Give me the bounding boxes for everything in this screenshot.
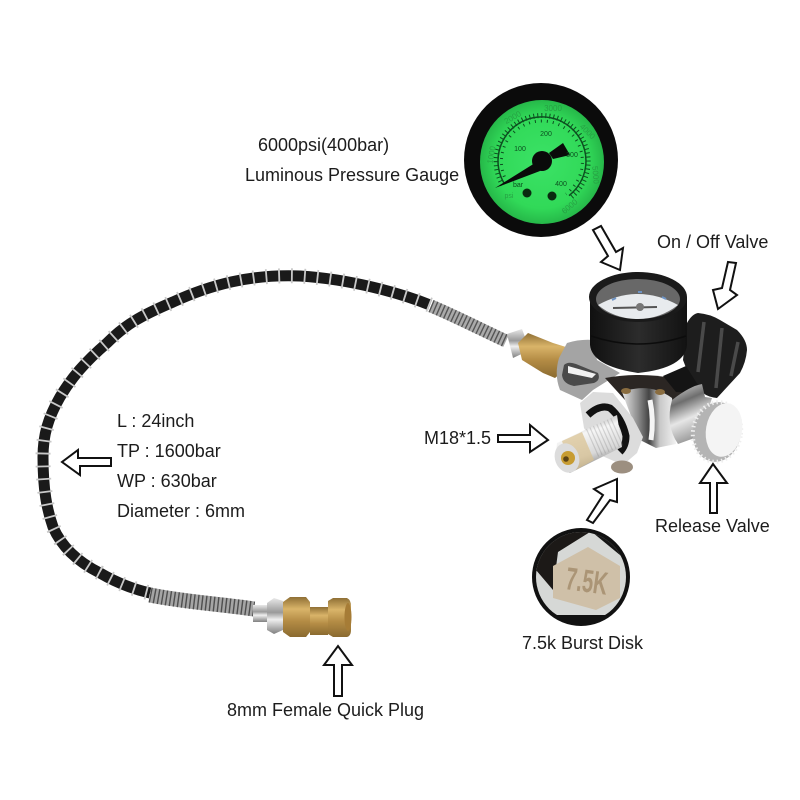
pressure gauge — [589, 272, 687, 373]
gauge numbers: 2000 — [503, 109, 523, 126]
centre ball — [621, 388, 676, 448]
label: quick plug: 8mm Female Quick Plug — [227, 700, 424, 720]
hose specifications: L : 24inch — [117, 411, 194, 431]
gauge numbers: bar — [513, 182, 524, 189]
hose specifications: WP : 630bar — [117, 471, 217, 491]
hose specifications: Diameter : 6mm — [117, 501, 245, 521]
dark valve seat — [605, 375, 692, 425]
arrow: to gauge — [593, 226, 623, 270]
title: gauge label: 6000psi(400bar) — [258, 135, 389, 155]
gauge numbers: 5000 — [590, 166, 601, 185]
black hose — [43, 276, 430, 593]
gauge numbers: 1000 — [486, 145, 498, 164]
gauge numbers: psi — [505, 193, 514, 200]
arrow: to release valve — [700, 464, 727, 513]
arrow: to quick plug — [324, 646, 352, 696]
hose specifications: TP : 1600bar — [117, 441, 221, 461]
label: on/off valve: On / Off Valve — [657, 232, 768, 252]
callout: gauge close-up — [464, 83, 618, 237]
on/off valve knob — [663, 313, 747, 398]
M18 threaded stem — [551, 407, 626, 476]
arrow: to burst disk — [587, 479, 617, 523]
lower metal spring — [150, 595, 254, 609]
label: burst disk: 7.5k Burst Disk — [522, 633, 644, 653]
label: M18: M18*1.5 — [424, 428, 491, 448]
label: release valve: Release Valve — [655, 516, 770, 536]
hose specifications — [117, 411, 245, 521]
burst disk bolt — [611, 460, 633, 474]
hose assembly — [43, 276, 506, 609]
rear chrome body — [557, 340, 620, 400]
gauge numbers: 300 — [566, 152, 578, 159]
arrow: to knob — [713, 262, 737, 309]
gauge numbers: 100 — [514, 146, 526, 153]
callout: burst disk close-up: 7.5K — [564, 560, 610, 602]
arrow: to stem — [498, 425, 548, 452]
arrow: to hose — [62, 450, 111, 475]
gauge dial arc — [498, 117, 586, 196]
callout: burst disk close-up — [532, 528, 630, 626]
gauge numbers: 6000 — [560, 197, 580, 216]
flange — [580, 392, 643, 465]
gauge needle — [495, 143, 570, 188]
lower fitting: 8mm female quick plug — [253, 597, 352, 637]
gauge numbers: 3000 — [544, 104, 562, 113]
upper metal spring — [431, 306, 506, 341]
gauge numbers: 200 — [540, 131, 552, 138]
regulator valve — [507, 272, 747, 476]
gauge numbers — [486, 104, 601, 216]
upper nut — [507, 329, 530, 358]
brass connector — [518, 333, 566, 378]
release valve — [670, 384, 746, 466]
title: gauge label: Luminous Pressure Gauge — [245, 165, 459, 185]
gauge numbers: 400 — [555, 181, 567, 188]
gauge numbers: 4000 — [578, 122, 597, 142]
title: gauge label — [245, 135, 459, 185]
spiral guard wire — [43, 276, 430, 593]
